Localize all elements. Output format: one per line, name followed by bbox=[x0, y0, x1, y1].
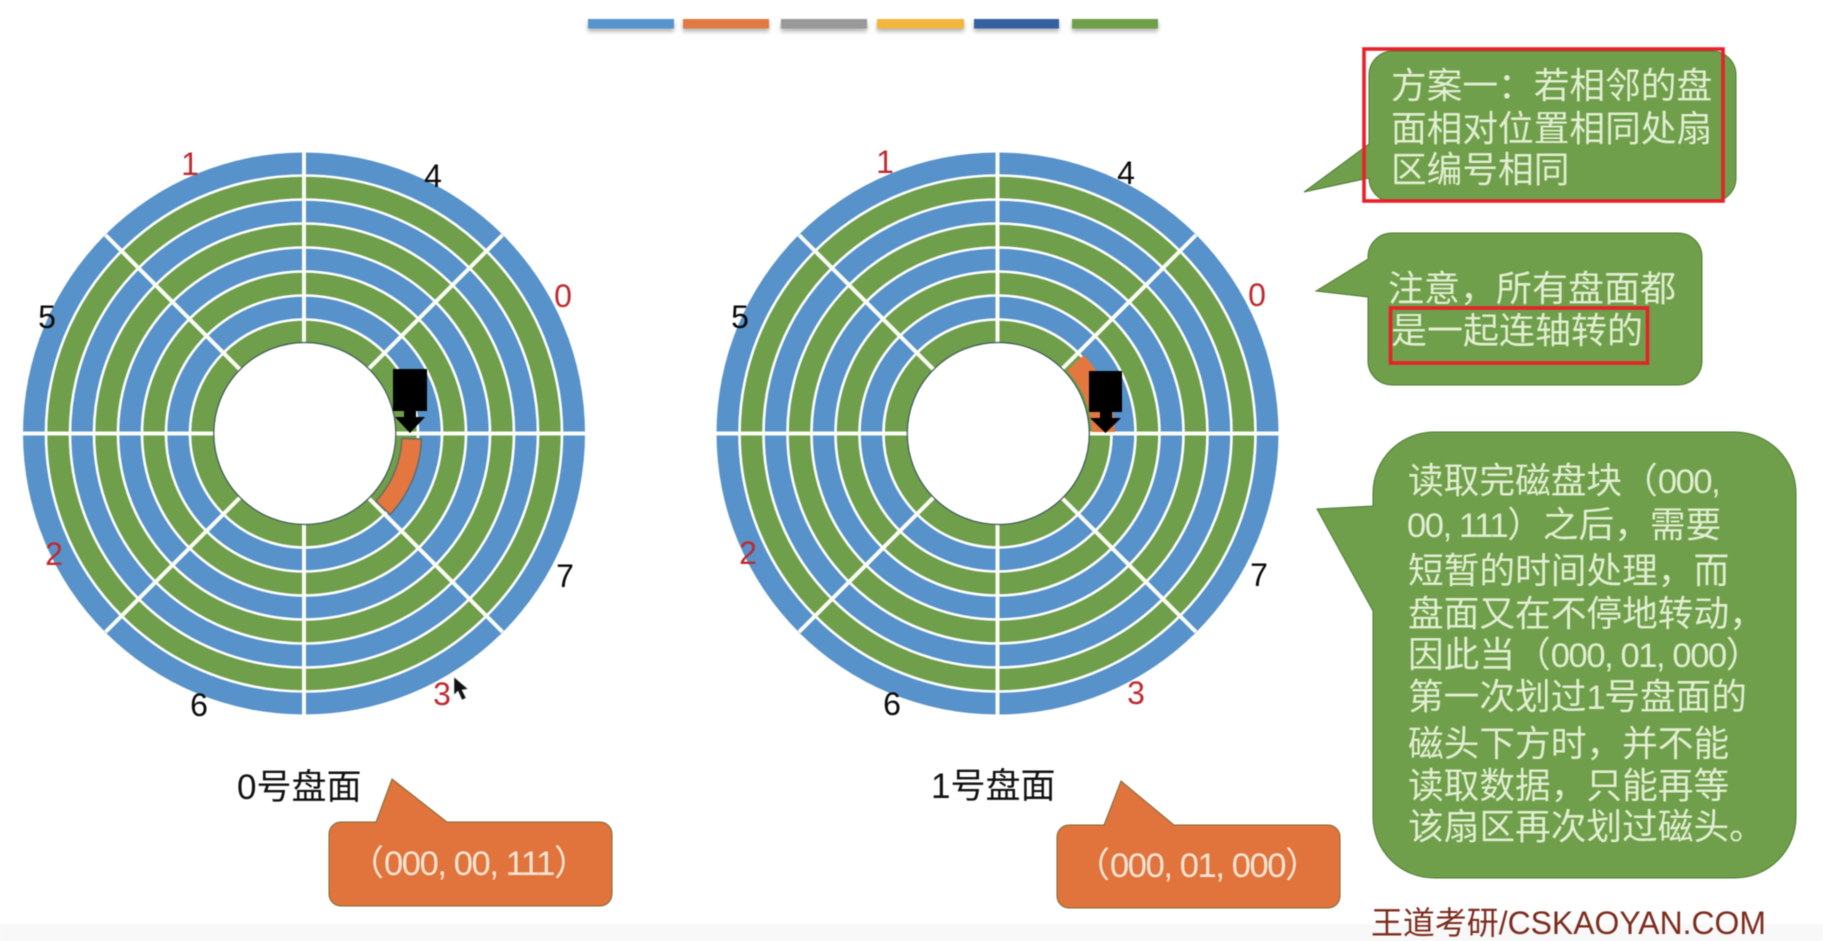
platter 0 sector numbers: 4 bbox=[424, 158, 442, 194]
platter 1 sector numbers: 6 bbox=[883, 686, 901, 722]
platter 0 disk rings bbox=[22, 152, 586, 716]
callout: address 000,01,000: （000, 01, 000） bbox=[1075, 846, 1320, 885]
platter 1 highlighted sector bbox=[1067, 355, 1115, 432]
platter 1 sector numbers: 4 bbox=[1117, 155, 1135, 191]
platter 0 sector numbers bbox=[38, 146, 574, 723]
platter 1 bbox=[716, 144, 1280, 722]
callout: address 000,00,111: （000, 00, 111） bbox=[349, 844, 589, 883]
callout: platters rotate together: 注意，所有盘面都 bbox=[1388, 268, 1676, 309]
platter 0 sector numbers: 0 bbox=[554, 278, 572, 314]
platter 1 disk rings bbox=[716, 152, 1280, 716]
callout: rotational delay explanation: 读取完磁盘块（000, bbox=[1408, 461, 1719, 501]
watermark: 王道考研/CSKAOYAN.COM bbox=[1371, 905, 1766, 941]
callout: scheme one: 面相对位置相同处扇 bbox=[1391, 109, 1712, 149]
platter 1 read head bbox=[1089, 371, 1122, 433]
platter 0 sector numbers: 5 bbox=[38, 299, 56, 335]
callout: rotational delay explanation: 磁头下方时，并不能 bbox=[1408, 724, 1729, 764]
callout: address 000,01,000 bbox=[1057, 781, 1340, 908]
label: platter 1: 1号盘面 bbox=[931, 767, 1055, 806]
platter 1 sector numbers: 7 bbox=[1250, 557, 1268, 593]
highlight box: rotate together bbox=[1390, 308, 1648, 363]
callout: rotational delay explanation: 因此当（000, 01, 000） bbox=[1408, 635, 1761, 675]
label: platter 0: 0号盘面 bbox=[237, 768, 361, 807]
callout: rotational delay explanation: 盘面又在不停地转动， bbox=[1408, 594, 1765, 634]
callout: rotational delay explanation: 该扇区再次划过磁头。 bbox=[1408, 807, 1765, 847]
callout: rotational delay explanation bbox=[1317, 432, 1796, 878]
platter 0 sector numbers: 1 bbox=[181, 146, 199, 182]
platter 1 sector numbers: 0 bbox=[1248, 277, 1266, 313]
mouse cursor bbox=[454, 677, 468, 700]
platter 0 highlighted sector bbox=[376, 438, 421, 514]
platter 0 read head bbox=[393, 369, 427, 433]
platter 0 sector numbers: 6 bbox=[190, 687, 208, 723]
platter 1 sector numbers: 5 bbox=[731, 299, 749, 335]
callout: scheme one: 方案一：若相邻的盘 bbox=[1391, 66, 1712, 106]
platter 0 sector numbers: 7 bbox=[556, 558, 574, 594]
platter 0 sector numbers: 3 bbox=[433, 676, 451, 712]
callout: platters rotate together: 是一起连轴转的 bbox=[1391, 310, 1643, 351]
callout: rotational delay explanation: 短暂的时间处理，而 bbox=[1408, 551, 1729, 591]
callout: rotational delay explanation: 第一次划过1号盘面的 bbox=[1408, 677, 1747, 717]
callout: scheme one bbox=[1304, 51, 1736, 202]
callout: rotational delay explanation: 读取数据，只能再等 bbox=[1408, 766, 1729, 806]
top colour bars bbox=[588, 19, 1158, 28]
platter 1 sector numbers: 3 bbox=[1127, 675, 1145, 711]
footer tint bbox=[0, 924, 1823, 941]
platter 1 sector numbers: 1 bbox=[876, 144, 894, 180]
callout: address 000,00,111 bbox=[329, 779, 612, 906]
platter 0 sector numbers: 2 bbox=[45, 536, 63, 572]
callout: scheme one: 区编号相同 bbox=[1391, 150, 1569, 190]
platter 0 bbox=[22, 146, 586, 723]
highlight box: scheme one bbox=[1364, 49, 1723, 201]
platter 1 sector numbers bbox=[731, 144, 1268, 722]
callout: platters rotate together bbox=[1316, 233, 1702, 385]
callout: rotational delay explanation: 00, 111）之后，需要 bbox=[1407, 505, 1721, 545]
platter 1 sector numbers: 2 bbox=[739, 535, 757, 571]
